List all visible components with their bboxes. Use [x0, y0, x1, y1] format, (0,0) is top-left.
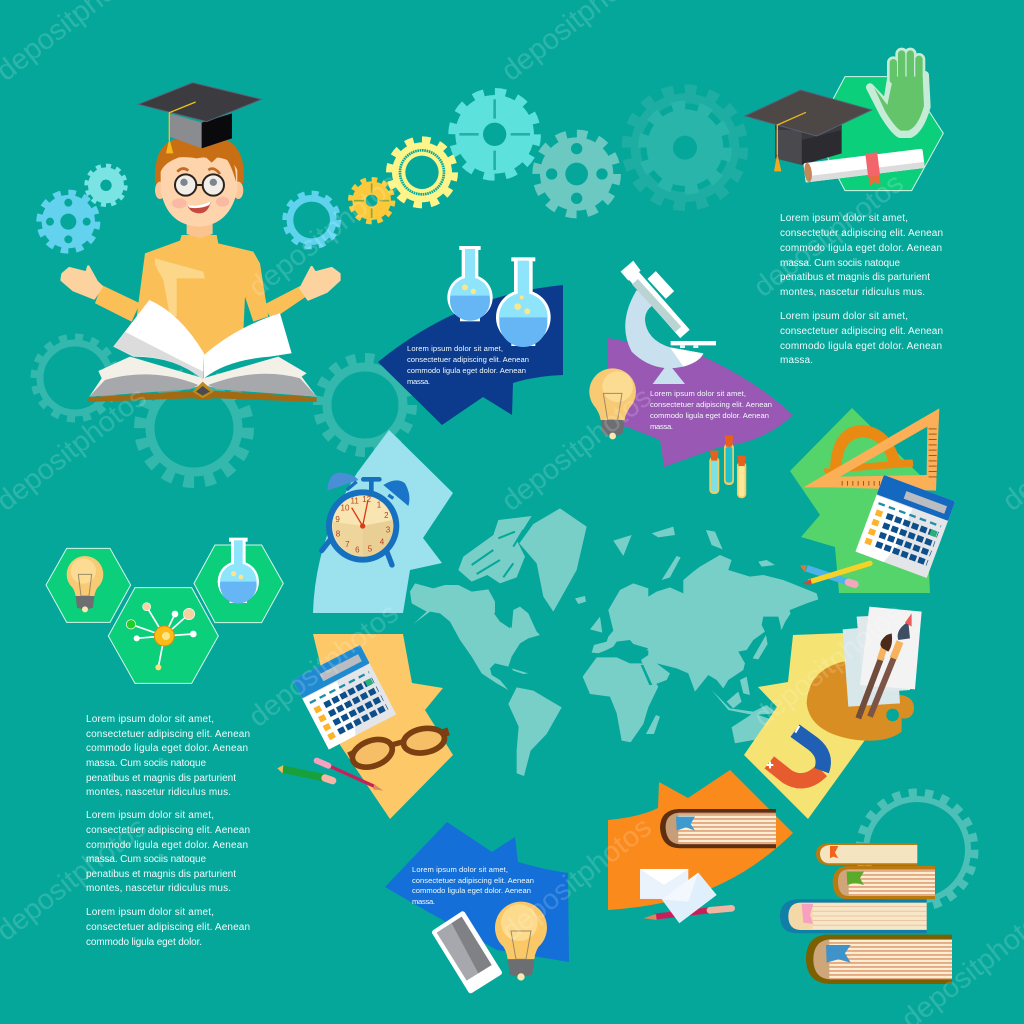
UK [590, 617, 602, 633]
text: top right: consectetuer adipiscing elit. Aenean [780, 326, 943, 337]
clock numerals: 2 [384, 511, 389, 520]
icon: bulb blue [495, 902, 547, 981]
panel: top right icons [745, 54, 943, 194]
text: left column [86, 714, 250, 948]
shirt highlight [155, 258, 205, 317]
text: left column: montes, nascetur ridiculus mus. [86, 883, 231, 894]
watermarks: depositphotos [496, 811, 658, 948]
Novaya Zemlya [662, 556, 681, 580]
text: left column: Lorem ipsum dolor sit amet, [86, 810, 214, 821]
Red Sea [641, 665, 652, 685]
text: blue arrow: commodo ligula eget dolor. Aenean [412, 886, 531, 895]
tassel [169, 102, 196, 140]
arrow: purple [608, 338, 793, 467]
faint gear: centre [318, 358, 412, 452]
clock numerals: 9 [335, 515, 340, 524]
hexagon: bulb [46, 548, 131, 622]
book on orange arrow [660, 809, 776, 848]
text: top right: Lorem ipsum dolor sit amet, [780, 311, 908, 322]
icon: microscope [621, 261, 716, 384]
text: top right: commodo ligula eget dolor. Aenean [780, 243, 942, 254]
mouth [187, 201, 211, 213]
hair fringe [160, 148, 236, 182]
text: blue arrow [412, 865, 534, 906]
arrow: light blue [313, 430, 453, 613]
icon: phone [435, 914, 499, 991]
icon: set square and protractor [803, 408, 939, 491]
text: left column: commodo ligula eget dolor. [86, 937, 202, 948]
Japan [753, 635, 768, 659]
icon: palette and brushes [640, 607, 952, 984]
icon: alarm clock [322, 473, 409, 565]
tassel [777, 112, 806, 155]
text: top right: montes, nascetur ridiculus mus. [780, 287, 925, 298]
text: purple arrow: commodo ligula eget dolor. Aenean [650, 411, 769, 420]
text: left column: penatibus et magnis dis parturient [86, 869, 236, 880]
book stack: second [833, 866, 935, 899]
gear: bright cyan [453, 93, 536, 176]
Madagascar [646, 715, 660, 734]
clock face [326, 489, 399, 563]
hexagon: network [108, 588, 218, 683]
clock numerals: 1 [377, 501, 382, 510]
ears [155, 182, 243, 199]
eyebrows [177, 169, 220, 174]
text: left column: Lorem ipsum dolor sit amet, [86, 714, 214, 725]
faint gear: bottom right [860, 793, 974, 907]
text: navy arrow: massa. [407, 377, 430, 386]
Arctic islands [458, 516, 532, 583]
icon: flask [218, 538, 259, 603]
text: top right: Lorem ipsum dolor sit amet, [780, 213, 908, 224]
clock numerals: 5 [368, 544, 373, 553]
clock numerals: 11 [351, 496, 359, 505]
arrow: blue [385, 822, 569, 962]
arrow: green [790, 408, 930, 593]
icon: bulb purple [589, 368, 636, 439]
watermarks: depositphotos [243, 597, 405, 734]
book stack: top [816, 843, 917, 865]
cap top [138, 83, 262, 122]
Philippines [740, 677, 750, 695]
boy illustration [62, 83, 339, 402]
text: left column: montes, nascetur ridiculus mus. [86, 787, 231, 798]
text: purple arrow: Lorem ipsum dolor sit amet, [650, 389, 746, 398]
icon: flasks on navy arrow [447, 246, 551, 347]
South America [508, 687, 562, 776]
mortarboard top [745, 90, 872, 136]
brushes [858, 657, 882, 718]
text: left column: penatibus et magnis dis parturient [86, 773, 236, 784]
Sumatra and Java [712, 690, 777, 715]
face [161, 157, 237, 227]
faint gear: below book [140, 374, 248, 482]
text: navy arrow [407, 344, 529, 386]
icon: pencils left [277, 761, 383, 791]
watermarks: depositphotos [496, 381, 658, 518]
watermarks: depositphotos [748, 597, 910, 734]
Sakhalin [780, 608, 791, 630]
clock legs [322, 540, 392, 565]
Arctic channels [472, 530, 523, 577]
Australia [732, 713, 773, 743]
Severnaya [706, 530, 723, 549]
Borneo [727, 692, 742, 708]
book pages turning [113, 300, 204, 380]
gear: grey teal [537, 134, 617, 214]
envelopes [640, 869, 688, 899]
text: blue arrow: massa. [412, 897, 435, 906]
Eurasia [592, 555, 818, 692]
text: left column: consectetuer adipiscing elit. Aenean [86, 825, 250, 836]
faint gear: left [34, 337, 116, 419]
icon: network [126, 603, 197, 670]
text: top right: commodo ligula eget dolor. Aenean [780, 341, 942, 352]
text: purple arrow: massa. [650, 422, 673, 431]
text: blue arrow: Lorem ipsum dolor sit amet, [412, 865, 508, 874]
text: left column: consectetuer adipiscing elit. Aenean [86, 922, 250, 933]
text: top right [780, 213, 943, 366]
magnet [769, 762, 822, 781]
North America [410, 583, 540, 690]
hair back [155, 140, 244, 183]
gear: amber [351, 180, 393, 222]
gear: pale [87, 166, 125, 205]
clock numerals [335, 495, 391, 554]
clock numerals: 4 [380, 538, 385, 547]
icon: test tubes [709, 436, 746, 498]
glasses [175, 174, 224, 196]
icon: crossed pencils right [800, 563, 870, 585]
panel: left hexagons [46, 538, 283, 683]
Svalbard [613, 535, 632, 556]
hands [62, 267, 339, 299]
clock numerals: 8 [336, 530, 341, 539]
Franz Josef [652, 527, 675, 537]
watermarks: depositphotos [748, 167, 910, 304]
Africa [583, 657, 658, 742]
neck [187, 220, 213, 238]
Iceland [575, 596, 586, 604]
text: blue arrow: consectetuer adipiscing elit. Aenean [412, 876, 534, 885]
raised hand [870, 54, 927, 134]
text: navy arrow: consectetuer adipiscing elit. Aenean [407, 355, 529, 364]
Mediterranean [597, 647, 648, 661]
flask small [447, 246, 493, 321]
Cuba [512, 668, 528, 674]
text: purple arrow: consectetuer adipiscing elit. Aenean [650, 400, 772, 409]
text: top right: consectetuer adipiscing elit. Aenean [780, 228, 943, 239]
icon: calculator right [856, 475, 955, 578]
diploma [803, 147, 926, 194]
text: left column: commodo ligula eget dolor. Aenean [86, 743, 248, 754]
book stack: bottom [806, 935, 952, 984]
arms [95, 285, 306, 322]
text: left column: Lorem ipsum dolor sit amet, [86, 907, 214, 918]
pencil bottom [655, 908, 727, 917]
gear: blue holes [40, 193, 97, 250]
text: left column: massa. Cum sociis natoque [86, 854, 206, 865]
book page block [89, 357, 317, 397]
hexagon [815, 77, 943, 191]
text: top right: penatibus et magnis dis parturient [780, 272, 930, 283]
clock numerals: 6 [355, 545, 360, 554]
cap block [169, 113, 232, 148]
clock numerals: 10 [341, 504, 350, 513]
papers [843, 625, 900, 707]
Greenland [519, 508, 587, 612]
icon: calculator left [293, 645, 396, 749]
New Siberian [758, 560, 775, 567]
eyes [180, 179, 188, 186]
flask large [496, 257, 551, 347]
torso [137, 235, 268, 360]
book stack: third [780, 899, 927, 933]
gear: large faint [626, 89, 744, 206]
hexagon: flask [194, 545, 283, 623]
text: top right: massa. [780, 355, 813, 366]
gear row [351, 89, 744, 222]
icon: bulb [67, 556, 103, 612]
text: navy arrow: Lorem ipsum dolor sit amet, [407, 344, 503, 353]
Black Sea [617, 640, 633, 646]
arrow: light orange [313, 634, 453, 819]
mortarboard block [775, 125, 802, 165]
clock numerals: 12 [362, 495, 372, 504]
arrow: orange [608, 770, 793, 910]
text: left column: commodo ligula eget dolor. Aenean [86, 840, 248, 851]
palette [807, 661, 914, 741]
world map [410, 508, 818, 776]
watermarks: depositphotos [243, 167, 405, 304]
cheeks [172, 198, 187, 208]
gear: yellow [390, 140, 454, 204]
text: top right: massa. Cum sociis natoque [780, 258, 900, 269]
arrow: yellow [744, 633, 865, 819]
text: navy arrow: commodo ligula eget dolor. Aenean [407, 366, 526, 375]
text: left column: massa. Cum sociis natoque [86, 758, 206, 769]
book cover [88, 391, 317, 402]
text: purple arrow [650, 389, 772, 431]
book spine ornament [193, 382, 214, 398]
icon: eyeglasses [348, 725, 447, 772]
arrow: navy [378, 285, 563, 425]
gear: blue ring [286, 194, 338, 246]
Hudson Bay [494, 607, 512, 628]
clock numerals: 3 [386, 526, 391, 535]
text: left column: consectetuer adipiscing elit. Aenean [86, 729, 250, 740]
clock numerals: 7 [345, 540, 350, 549]
clock hands [352, 500, 368, 526]
clock bells [327, 473, 358, 491]
